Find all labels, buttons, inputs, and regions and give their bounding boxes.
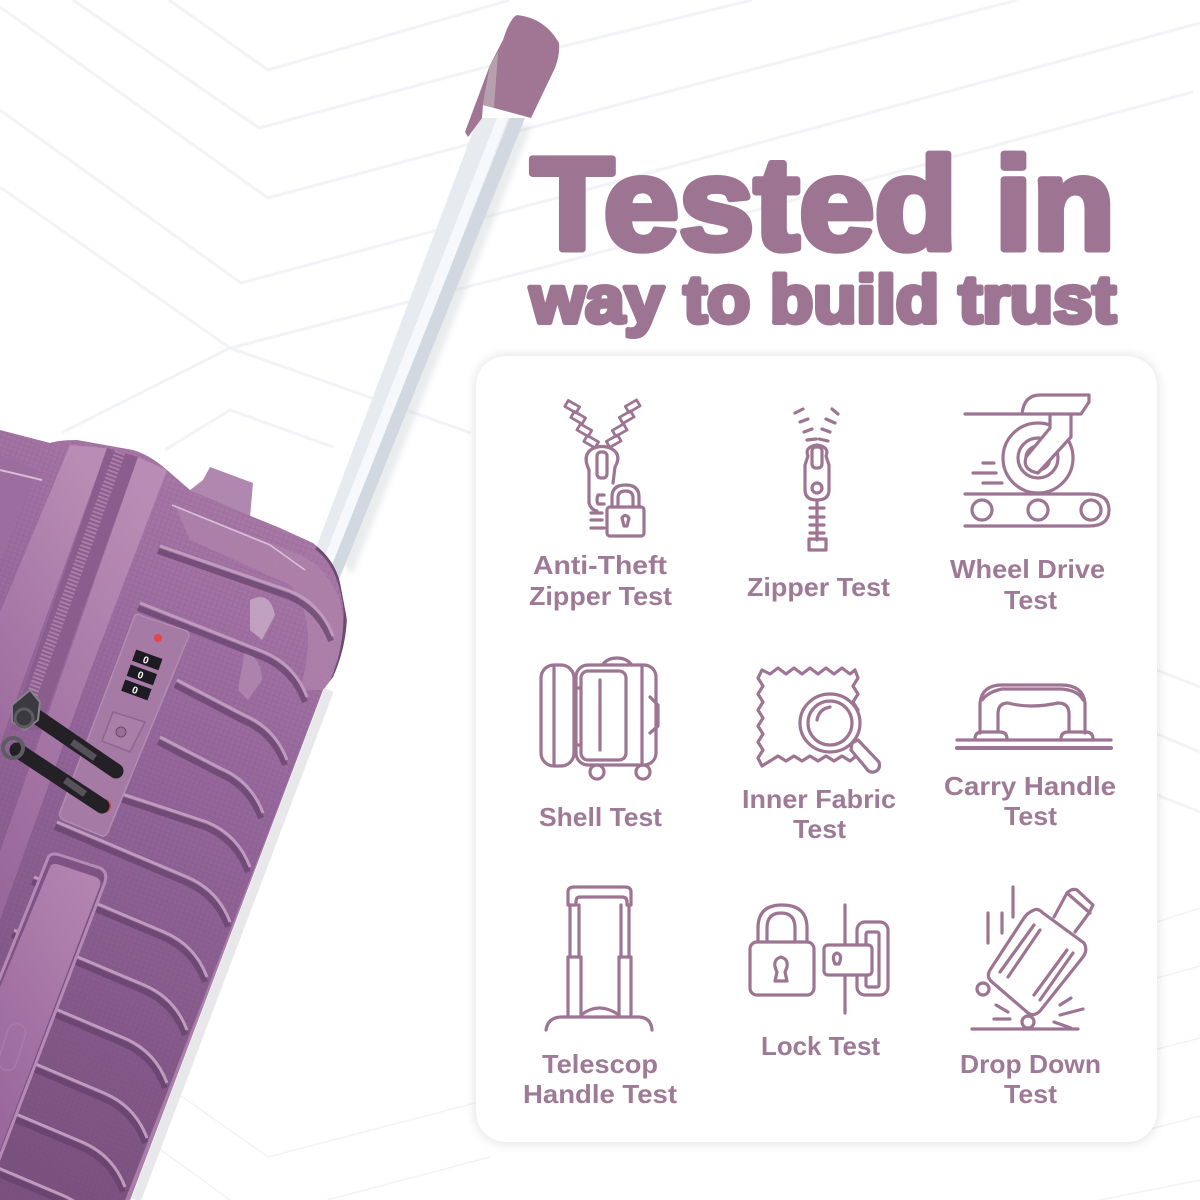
- heading: Tested in: [531, 130, 1115, 277]
- item: telescop handle test: [523, 887, 677, 1109]
- item: inner fabric test: [742, 668, 896, 844]
- label: Drop Down: [960, 1049, 1101, 1079]
- label: Anti-Theft: [533, 550, 667, 580]
- item: drop down test: [960, 887, 1101, 1109]
- heading: [529, 130, 1116, 338]
- icon: fabric and magnifier: [758, 668, 879, 772]
- TSA combination lock: 0: [136, 670, 145, 682]
- item: wheel drive test: [950, 395, 1109, 615]
- TSA combination lock: [59, 614, 189, 836]
- front closure bands: [0, 445, 167, 920]
- heading: way to build trust: [529, 262, 1116, 338]
- icon: wheel on belt: [965, 395, 1109, 526]
- item: carry handle test: [944, 685, 1116, 831]
- label: Inner Fabric: [742, 784, 896, 814]
- item: shell test: [539, 658, 662, 832]
- top carry bump: [190, 467, 253, 517]
- label: Carry Handle: [944, 771, 1116, 801]
- edge strip: [125, 670, 335, 1200]
- suitcase shell: [0, 420, 360, 1200]
- label: [950, 554, 1105, 615]
- label: Test: [1004, 1079, 1057, 1109]
- corner rim: [316, 548, 345, 685]
- icon: zipper with padlock: [565, 400, 644, 536]
- TSA combination lock: 0: [141, 655, 151, 667]
- rod cap: [465, 15, 559, 137]
- icon: telescopic handle: [546, 887, 652, 1030]
- label: [742, 784, 896, 844]
- icon: dropping suitcase: [972, 887, 1093, 1029]
- item: zipper test: [747, 409, 890, 602]
- item: lock test: [750, 905, 888, 1061]
- icon: open suitcase: [541, 658, 658, 779]
- label: [960, 1049, 1101, 1109]
- icon: carry handle: [957, 685, 1111, 748]
- label: Shell Test: [539, 802, 662, 832]
- suitcase photo: [0, 15, 559, 1200]
- panel: tests: [476, 356, 1157, 1142]
- shell gloss highlights: [172, 505, 347, 700]
- label: Wheel Drive: [950, 554, 1105, 584]
- zipper pulls: [3, 690, 116, 806]
- label: [944, 771, 1116, 831]
- label: Zipper Test: [747, 572, 890, 602]
- label: Handle Test: [523, 1079, 677, 1109]
- panel shadow: [476, 356, 1157, 1143]
- suitcase edge shadow: [136, 690, 329, 1200]
- label: [523, 1049, 677, 1109]
- icon: zipper: [795, 409, 838, 550]
- shell ribs: [0, 546, 333, 1200]
- label: Test: [1004, 585, 1057, 615]
- icon: padlock and latch: [750, 905, 888, 1013]
- label: Zipper Test: [529, 581, 672, 611]
- label: Lock Test: [761, 1031, 880, 1061]
- label: [529, 550, 672, 611]
- item: anti-theft zipper test: [529, 400, 672, 611]
- side handle: [0, 854, 106, 1170]
- telescopic rod: [316, 118, 532, 582]
- label: Telescop: [542, 1049, 658, 1079]
- TSA combination lock: 0: [130, 685, 140, 697]
- label: Test: [1004, 801, 1057, 831]
- label: Test: [793, 814, 846, 844]
